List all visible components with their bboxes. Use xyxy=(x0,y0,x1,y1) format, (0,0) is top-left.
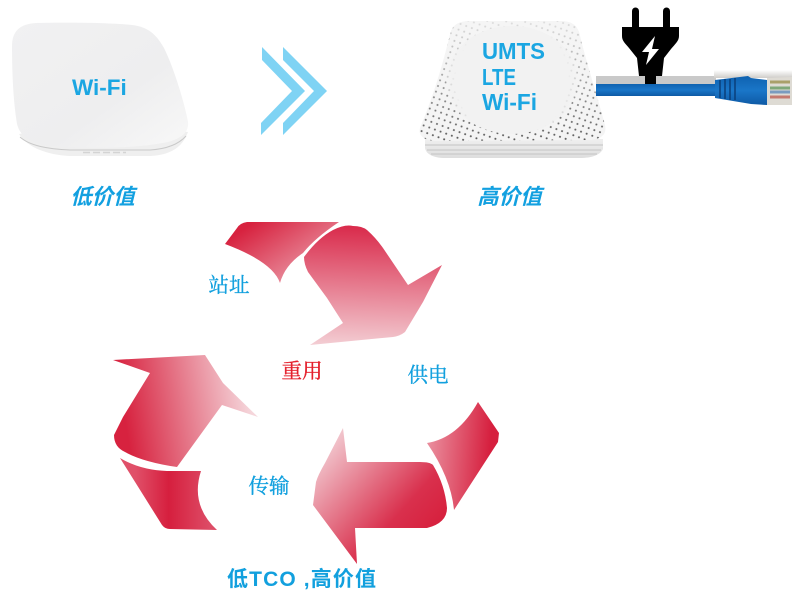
label: LTE: LTE xyxy=(482,64,516,90)
label: reuse: 重用 xyxy=(282,360,322,383)
indicator lights xyxy=(83,152,126,154)
heading: high value: 高价值 xyxy=(476,184,547,209)
label: Wi-Fi: Wi-Fi xyxy=(482,89,537,115)
cable: grey power band and blue ethernet xyxy=(596,70,792,105)
label: Wi-Fi: Wi-Fi xyxy=(72,75,127,100)
label: power supply: 供电 xyxy=(408,364,448,387)
arrow: site segment xyxy=(225,222,442,345)
recycle diagram xyxy=(113,222,499,564)
arrow: double chevron xyxy=(261,47,327,135)
router: low-value Wi-Fi device xyxy=(12,23,188,156)
router: high-value multi-radio device xyxy=(420,21,605,158)
heading: low value: 低价值 xyxy=(69,184,140,209)
ethernet connector xyxy=(714,70,792,105)
label: UMTS: UMTS xyxy=(482,38,545,64)
label: transmission: 传输 xyxy=(248,475,290,498)
icon: power plug xyxy=(622,8,679,84)
heading: low TCO, high value: 低TCO ,高价值 xyxy=(227,567,376,591)
arrow: transmission segment xyxy=(113,355,258,530)
arrow: power segment xyxy=(313,402,499,564)
label: site: 站址 xyxy=(208,274,250,297)
